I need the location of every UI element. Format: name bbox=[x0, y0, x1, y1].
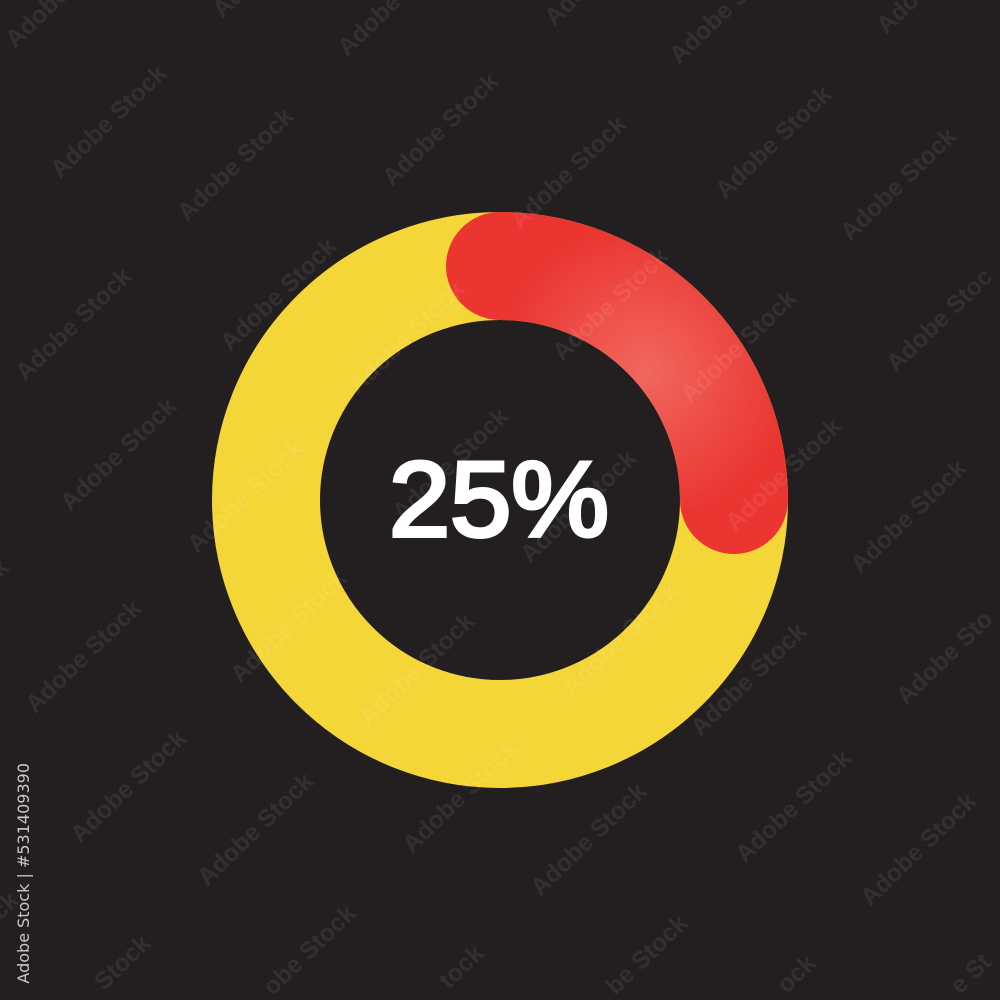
stock watermarks: Adobe Stock bbox=[836, 123, 962, 246]
stock watermarks: Adobe Stock bbox=[21, 595, 147, 718]
stock watermarks: Adobe Stock bbox=[378, 68, 504, 191]
stock watermarks: Adobe Stock bbox=[66, 725, 192, 848]
stock watermarks: Adobe Stock bbox=[721, 413, 847, 536]
stock watermarks: Adobe Stock bbox=[516, 445, 642, 568]
stock watermarks: Adobe Stock bbox=[226, 565, 352, 688]
stock watermarks: Adobe Stock bbox=[526, 778, 652, 901]
stock watermarks: Adobe Stock bbox=[398, 735, 524, 858]
stock watermarks: Adobe Stock bbox=[548, 243, 674, 366]
stock watermarks: Adobe Stock bbox=[846, 455, 972, 578]
vertical stock id label: Adobe Stock | #531409390 bbox=[14, 763, 33, 984]
stock watermarks: Adobe Stock bbox=[711, 81, 837, 204]
stock watermarks: Adobe Sto bbox=[891, 606, 998, 710]
stock watermarks: Adobe Stock bbox=[354, 608, 480, 731]
stock watermarks: Adobe Stock bbox=[506, 111, 632, 234]
stock watermarks: Adobe Stock bbox=[193, 768, 319, 891]
stock watermarks: ock bbox=[772, 950, 821, 999]
stock watermarks: Adobe Stock bbox=[686, 618, 812, 741]
donut arc: 25% share bbox=[500, 266, 734, 500]
stock watermarks: Adobe Stock bbox=[731, 745, 857, 868]
stock watermarks: Stock bbox=[89, 930, 156, 996]
stock watermarks: obe Stock bbox=[258, 900, 361, 1000]
center value label: 25% bbox=[389, 439, 609, 559]
stock watermarks: Adobe Stock bbox=[173, 103, 299, 226]
stock watermarks: Adobe Stock bbox=[11, 263, 137, 386]
donut track: remaining share bbox=[266, 266, 734, 734]
stock watermarks: Adobe Stock bbox=[388, 403, 514, 526]
stock watermarks: Adobe Stock bbox=[183, 435, 309, 558]
stock watermarks: Adobe Stock bbox=[558, 578, 684, 701]
stock watermarks: Adobe Stock bbox=[344, 276, 470, 399]
stock watermarks: tock bbox=[434, 940, 489, 994]
stock watermarks: Adobe Stock bbox=[216, 233, 342, 356]
stock watermarks: Adobe Stoc bbox=[881, 263, 998, 377]
stock watermarks: e St bbox=[945, 949, 996, 999]
stock watermarks: Adobe Stock bbox=[856, 788, 982, 911]
stock watermarks: be Stock bbox=[601, 910, 693, 1000]
stock watermarks: Adobe Stock bbox=[46, 60, 172, 183]
stock watermarks: Adobe Stock bbox=[56, 393, 182, 516]
stock watermarks: Adobe Stock bbox=[676, 285, 802, 408]
